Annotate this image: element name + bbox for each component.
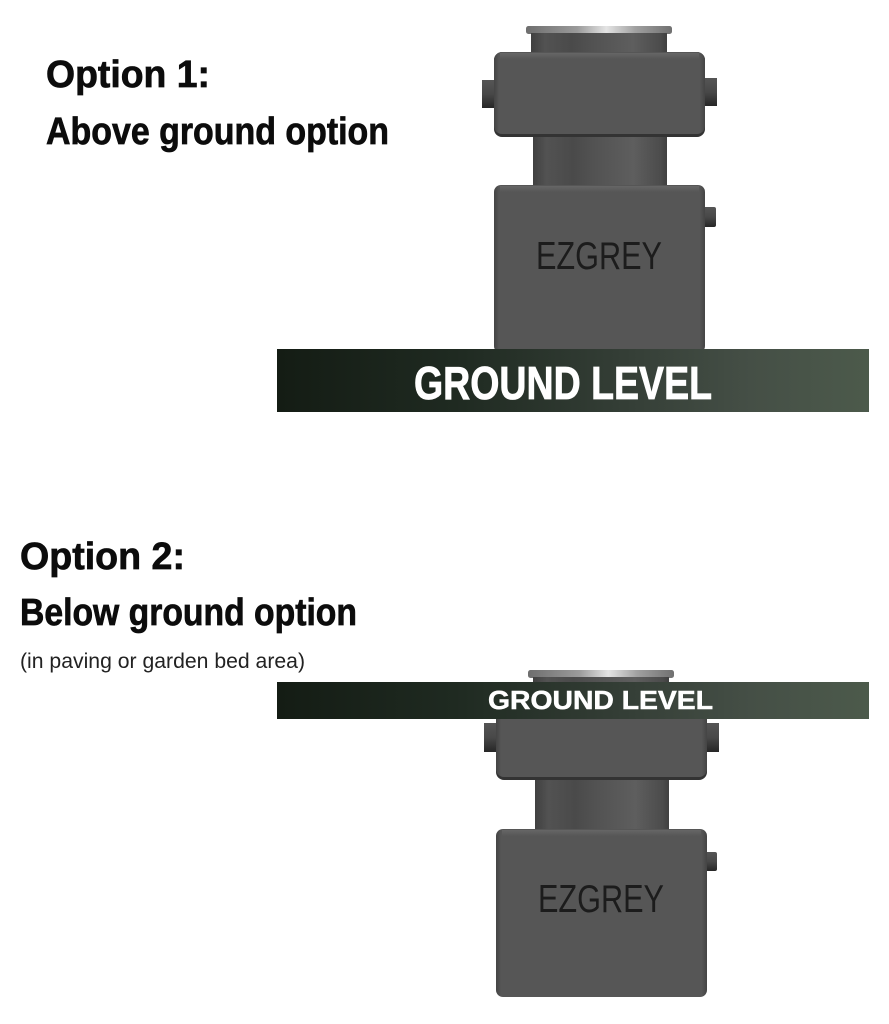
tank label: EZGREY [536, 235, 662, 278]
middle neck [533, 137, 667, 186]
left nozzle [484, 723, 497, 752]
tank rim [528, 670, 674, 678]
heading: option 2: Below ground option [20, 592, 357, 634]
heading: option 2 [20, 536, 357, 634]
lower box [494, 185, 705, 353]
ground level band: option 2: GROUND LEVEL [488, 685, 713, 715]
heading: option 1: Above ground option [46, 111, 389, 153]
small right nozzle [705, 852, 717, 871]
heading: option 1 [46, 54, 389, 153]
small right nozzle [703, 207, 716, 227]
tank: below ground unit [484, 670, 719, 997]
tank rim [526, 26, 672, 34]
ground level band: option 2 [277, 682, 869, 719]
upper box [494, 52, 705, 137]
tank upper neck [531, 33, 667, 53]
tank label: EZGREY [538, 878, 664, 921]
lower box [496, 829, 707, 997]
middle neck [535, 780, 669, 830]
heading: option 2: Option 2: [20, 536, 185, 578]
heading: option 1: Option 1: [46, 54, 210, 96]
subheading: option 2 note: (in paving or garden bed area) [20, 650, 305, 673]
upper box [496, 700, 707, 780]
tank: above ground unit [482, 26, 717, 353]
ground level band: option 1 [277, 349, 869, 412]
right nozzle [706, 723, 719, 752]
right nozzle [704, 78, 717, 106]
left nozzle [482, 80, 495, 108]
tank upper neck [533, 677, 669, 685]
ground level band: option 1: GROUND LEVEL [414, 357, 712, 409]
